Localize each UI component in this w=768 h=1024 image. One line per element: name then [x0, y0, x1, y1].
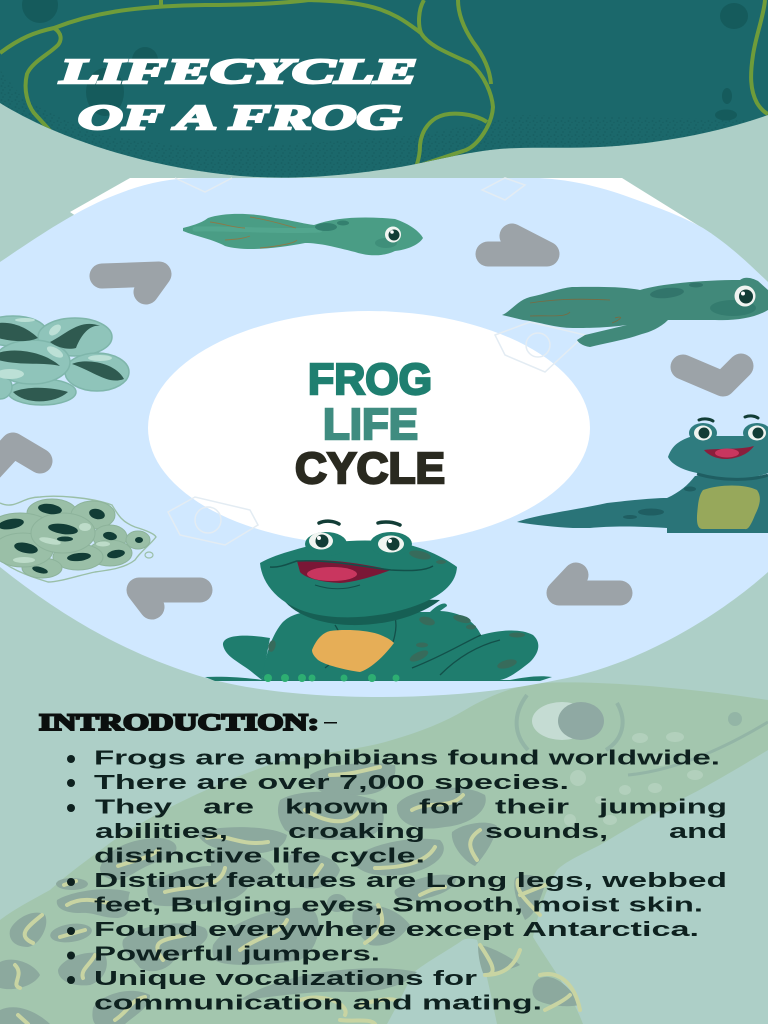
- bullet list text block: their: [495, 796, 569, 818]
- frog eyes: [305, 532, 412, 556]
- frog head: [260, 540, 457, 617]
- title: [58, 53, 417, 137]
- frog mouth: [297, 560, 391, 583]
- bullet list text block: Found everywhere except Antarctica.: [94, 918, 699, 941]
- background frog illustration: [0, 682, 768, 1024]
- bullet list text block: croaking: [288, 820, 425, 843]
- frog spots: [267, 613, 525, 670]
- bullet list text block: are: [203, 796, 254, 818]
- arrows: grey chevrons: [0, 236, 741, 607]
- centre heading: frog life cycle: FROG: [308, 355, 432, 404]
- bullet list text block: abilities,: [95, 820, 228, 843]
- header green vine lines: [0, 0, 768, 168]
- frog belly: [312, 630, 394, 672]
- title: LIFECYCLE: [58, 53, 417, 91]
- bullet list text block: for: [419, 796, 463, 818]
- frog back leg left: [223, 636, 270, 680]
- bullet list text block: jumping: [597, 796, 727, 818]
- bullet list text block: Frogs are amphibians found worldwide.: [94, 746, 720, 770]
- frog body: [262, 604, 538, 680]
- bullet list text block: They: [95, 796, 173, 818]
- frog toes: [264, 674, 400, 682]
- frog brows: [319, 521, 400, 525]
- frog eye: [517, 695, 768, 775]
- icon: froglet with tail: [517, 416, 768, 533]
- icon: tadpole top: [183, 214, 423, 255]
- bullet list text block: There are over 7,000 species.: [94, 771, 569, 794]
- bullet list text block: sounds,: [485, 820, 608, 843]
- white centre ellipse: [148, 311, 590, 545]
- bullet list text block: known: [285, 796, 389, 818]
- bullet list text block: [67, 746, 727, 1014]
- centre heading: frog life cycle: [295, 355, 445, 493]
- bullet list text block: Distinct features are Long legs, webbed: [94, 869, 727, 892]
- frog skin spots: [564, 732, 703, 826]
- bullet list text block: communication and mating.: [94, 992, 542, 1014]
- icon: egg cluster 2: [0, 496, 156, 582]
- frog yellow markings: [15, 767, 580, 1024]
- white corners behind the circle: [70, 178, 712, 300]
- bullet list text block: Unique vocalizations for: [94, 967, 477, 990]
- bullet list text block: and: [669, 820, 727, 843]
- icon: tadpole with legs: [502, 278, 768, 347]
- frog neck shadow: [280, 595, 440, 625]
- bullet list text block: distinctive life cycle.: [94, 844, 425, 868]
- header band: [0, 0, 768, 185]
- header dark spots: [22, 0, 748, 120]
- icon: egg cluster 1: [0, 316, 129, 405]
- light blue circle panel: [0, 178, 768, 697]
- centre heading: frog life cycle: CYCLE: [295, 444, 445, 493]
- title: OF A FROG: [78, 99, 401, 137]
- bullet list text block: feet, Bulging eyes, Smooth, moist skin.: [94, 894, 703, 916]
- frog blotches: [0, 763, 580, 1024]
- frog feet: [205, 676, 552, 681]
- icon: adult frog: [205, 521, 552, 682]
- centre heading: frog life cycle: LIFE: [323, 400, 418, 449]
- bullet list text block: Powerful jumpers.: [94, 942, 380, 966]
- heading: introduction: INTRODUCTION:: [39, 710, 319, 735]
- watermark marks: [168, 178, 585, 545]
